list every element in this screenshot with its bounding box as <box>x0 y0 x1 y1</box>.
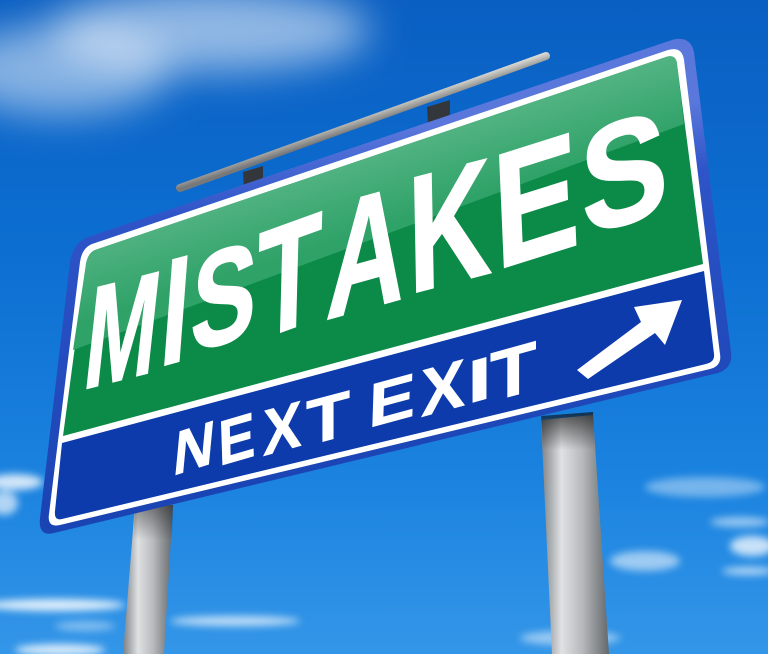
heading: MISTAKES: S <box>577 78 671 268</box>
green panel <box>63 56 703 436</box>
heading: MISTAKES: S <box>187 211 261 382</box>
text: NEXT EXIT: X <box>421 346 465 432</box>
text: NEXT EXIT: E <box>368 360 416 442</box>
text: NEXT EXIT: I <box>467 343 492 417</box>
text: NEXT EXIT: E <box>217 398 256 480</box>
text: NEXT EXIT: T <box>306 376 350 460</box>
heading: MISTAKES: T <box>255 178 324 374</box>
road sign <box>40 39 731 534</box>
gloss on green panel <box>73 56 684 350</box>
heading: MISTAKES <box>78 78 671 421</box>
heading: MISTAKES: K <box>406 122 493 330</box>
heading: MISTAKES: E <box>490 96 582 305</box>
heading: MISTAKES: A <box>323 150 411 356</box>
text: NEXT EXIT: N <box>171 406 218 489</box>
white outline <box>49 49 720 526</box>
right post <box>541 412 609 654</box>
blue panel <box>55 271 714 519</box>
text: NEXT EXIT <box>171 326 536 489</box>
sign border <box>40 39 731 534</box>
top rail with brackets <box>180 56 546 190</box>
icon: arrow <box>577 300 682 379</box>
heading: MISTAKES: I <box>156 220 196 400</box>
text: NEXT EXIT: X <box>263 387 302 471</box>
heading: MISTAKES: M <box>78 238 168 421</box>
text: NEXT EXIT: T <box>490 326 536 417</box>
left post <box>123 505 173 654</box>
